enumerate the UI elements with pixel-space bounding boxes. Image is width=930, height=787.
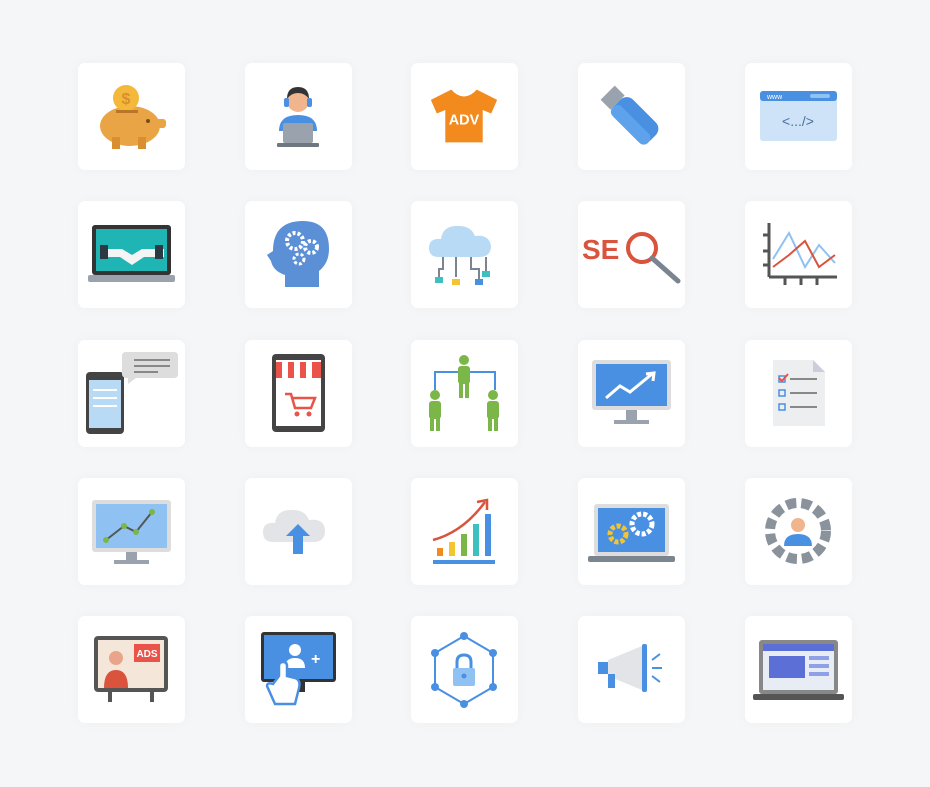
card: ADV shirt: ADV — [449, 112, 480, 128]
card: megaphone — [578, 616, 685, 723]
card: cloud network — [411, 201, 518, 308]
card: handshake laptop — [78, 201, 185, 308]
card: web code — [745, 63, 852, 170]
card: web code: www — [766, 94, 783, 101]
card: usb drive — [578, 63, 685, 170]
card: add user touch — [245, 616, 352, 723]
card: laptop webpage — [745, 616, 852, 723]
card: line chart — [745, 201, 852, 308]
card: people hierarchy — [411, 340, 518, 447]
card: laptop gears — [578, 478, 685, 585]
card: monitor graph — [78, 478, 185, 585]
card: ADS tv — [78, 616, 185, 723]
card: piggy bank: $ — [122, 91, 131, 108]
card: ADS tv: ADS — [136, 649, 158, 660]
card: hexagon lock — [411, 616, 518, 723]
card: add user touch: + — [311, 651, 320, 668]
card: web code: <.../> — [782, 113, 814, 129]
card: SEO — [578, 201, 685, 308]
card: SEO: SE — [582, 234, 619, 265]
card: headset support — [245, 63, 352, 170]
card: tablet shop — [245, 340, 352, 447]
card: monitor trend — [578, 340, 685, 447]
card: piggy bank — [78, 63, 185, 170]
card: cloud upload — [245, 478, 352, 585]
card: ADV shirt — [411, 63, 518, 170]
card: phone chat — [78, 340, 185, 447]
card: checklist — [745, 340, 852, 447]
card: gear person — [745, 478, 852, 585]
card: growth bars — [411, 478, 518, 585]
card: head gears — [245, 201, 352, 308]
